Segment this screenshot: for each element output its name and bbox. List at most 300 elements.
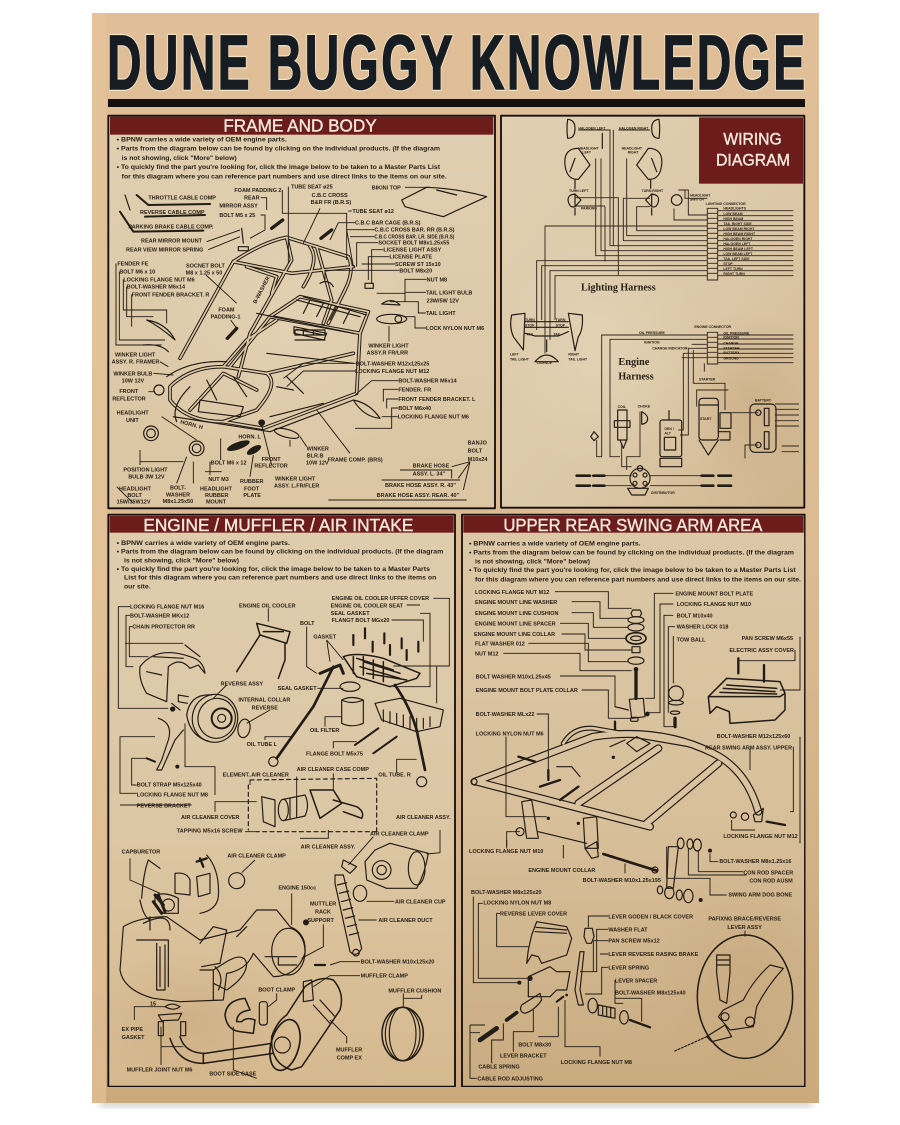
part labels: frame: BOLT M6 x 10	[119, 269, 155, 275]
part labels: frame: POSITION LIGHT	[123, 467, 168, 473]
part labels: frame: LOCK NYLON NUT M6	[426, 326, 484, 332]
panel: wiring diagram	[501, 116, 804, 508]
diagram: carburetor and engine block	[120, 855, 309, 1002]
part labels: frame: FENDER. FR	[398, 387, 431, 393]
part labels: engine top: CHAIN PROTECTOR RR	[132, 625, 195, 631]
wiring labels: SWITCH	[690, 198, 704, 202]
leader lines: swing top	[503, 592, 800, 847]
engine harness wires	[597, 335, 799, 486]
part labels: frame: THROTTLE CABLE COMP	[148, 195, 216, 201]
part labels: frame: REAR MIRROR MOUNT	[141, 238, 203, 244]
intro text block: for this diagram where you can reference part numbers and use direct links to the items on our site.	[122, 173, 447, 180]
diagram region: swing arm lower and reverse lever	[469, 838, 793, 1082]
part labels: frame: BOLT M5 x 25	[219, 213, 255, 219]
part labels: frame: PARKING BRAKE CABLE COMP.	[128, 225, 214, 231]
part labels: frame: HORN. H	[179, 419, 203, 431]
part labels: frame: C.B.C CROSS BAR. RR (B.R.S)	[374, 228, 455, 234]
part labels: frame: FRONT FENDER BRACKET. R	[132, 292, 209, 298]
panel: frame and body	[108, 116, 495, 508]
part labels: swing top: ELECTRIC ASSY COVER	[729, 648, 794, 654]
part labels: frame: WINKER LIGHT	[368, 343, 409, 349]
part labels: frame: LOCKING FLANGE NUT M6	[123, 277, 195, 283]
part labels: engine top: AIR CLEANER CLAMP	[370, 831, 429, 837]
part labels: frame: TUBE SEAT ø12	[352, 209, 394, 215]
wiring labels: HALOGEN LEFT	[578, 126, 606, 130]
intro text block: • BPNW carries a wide variety of OEM engine parts.	[469, 540, 641, 547]
part labels: frame: BOLT	[127, 493, 143, 499]
wiring labels: GEN /	[664, 427, 674, 431]
wiring labels: PARKING	[581, 206, 597, 210]
wiring labels: HALOGEN RIGHT	[723, 237, 753, 241]
part labels: frame: LICENSE PLATE	[389, 255, 433, 261]
part labels: swing lower: LEVER SPACER	[615, 978, 657, 984]
part labels: frame: C.B.C CROSS	[312, 193, 348, 199]
part labels: swing top: LOCKING FLANGE NUT M10	[677, 602, 751, 608]
part labels: frame: BOLT	[468, 449, 483, 455]
heading: wiring diagram	[716, 130, 790, 169]
part labels: engine top: BOLT-WASHER MKx12	[130, 613, 189, 619]
part labels: frame: ASSY.R FR/LRR	[367, 350, 408, 356]
part labels: frame: RUBBER	[205, 493, 228, 499]
leader lines: swing lower	[470, 840, 747, 1078]
part labels: frame: FRONT	[119, 389, 139, 395]
part labels: swing lower: REVERSE LEVER COVER	[500, 911, 567, 917]
part labels: engine top: AIR CLEANER COVER	[181, 815, 240, 821]
diagram: air cleaner	[248, 778, 377, 832]
part labels: engine top: REVERSE ASSY	[221, 681, 263, 687]
part labels: frame: REAR VIEW MIRROR SPRING	[126, 248, 203, 254]
part labels: frame: REFLECTOR	[112, 396, 146, 402]
part labels: swing top: ENGINE MOUNT LINE CUSHION	[475, 611, 559, 617]
wiring labels: TAIL LIGHT	[568, 358, 588, 362]
lighting harness wires	[537, 130, 793, 353]
part labels: swing top: LOCKING NYLON NUT M6	[476, 732, 544, 738]
part labels: swing top	[474, 590, 798, 840]
part labels: swing top: ENGINE MOUNT BOLT PLATE	[675, 591, 753, 597]
diagram: oil cooler and filter	[269, 628, 443, 787]
part labels: engine lower: AIR CLEANER ASSY.	[301, 845, 356, 851]
panel: engine / muffler / air intake	[108, 515, 455, 1087]
part labels: swing lower: LOCKING NYLON NUT M8	[483, 901, 551, 907]
part labels: swing top: ENGINE MOUNT LINE WASHER	[475, 600, 557, 606]
wiring labels: TURN	[556, 318, 566, 322]
engine connector block	[707, 332, 718, 364]
wiring labels	[510, 126, 772, 495]
part labels: engine lower: MUTTLER	[310, 901, 336, 907]
wiring labels: LEFT	[510, 353, 520, 357]
diagram: electric assy cover	[708, 658, 785, 723]
part labels: engine top: SEAL GASKET	[278, 686, 317, 692]
header bar: swing arm	[463, 516, 804, 533]
wiring labels: TAIL LIGHT	[510, 358, 530, 362]
panel border	[501, 116, 804, 508]
wiring labels: TURN RIGHT	[642, 189, 664, 193]
wiring labels: GROUND	[723, 356, 739, 360]
part labels: frame: NUT M3	[208, 477, 229, 483]
wiring labels: STARTER	[723, 346, 740, 350]
wiring labels: TAIL LEFT SIDE	[723, 257, 750, 261]
part labels: frame: BRAKE HOSE ASSY. R. 43"	[385, 483, 456, 489]
lighting connector block	[707, 208, 718, 280]
part labels: engine top: LOCKING FLANGE NUT M8	[137, 793, 208, 799]
part labels: engine top: ENGINE OIL COOLER SEAT	[331, 603, 404, 609]
diagram: air cleaner assembly and duct	[229, 843, 428, 965]
part labels: swing top: ENGINE MOUNT LINE COLLAR	[474, 632, 555, 638]
part labels: engine lower: AIR CLEANER CUP	[395, 899, 446, 905]
part labels: swing top: BOLT-WASHER M12x125x60	[717, 734, 790, 740]
wiring labels: HEADLIGHT	[622, 146, 643, 150]
part labels: frame: M10x24	[468, 457, 488, 463]
intro text block	[117, 540, 444, 590]
part labels: frame: BOLT M6 x 12	[211, 461, 247, 467]
diagram: dog bone and bolts	[585, 838, 712, 903]
part labels: engine lower: AIR CLEANER DUCT	[378, 918, 433, 924]
intro text block: • To quickly find the part you're looking for, click the image below to be taken to a Master Parts List	[469, 567, 797, 574]
wiring labels: HIGH BEAM RIGHT	[723, 232, 756, 236]
part labels: swing lower: BOLT-WASHER M8x125x40	[615, 991, 686, 997]
wiring labels: BATTERY	[723, 351, 740, 355]
part labels: swing lower	[469, 849, 793, 1082]
intro text block	[117, 136, 447, 180]
part labels: frame: 15W/35W12V	[117, 500, 151, 506]
part labels: frame: BRAKE HOSE ASSY. REAR. 40"	[377, 493, 460, 499]
wiring labels: HALOGEN RIGHT	[619, 126, 649, 130]
part labels: swing lower: CABLE ROD ADJUSTING	[477, 1076, 543, 1082]
part labels: engine top: TAPPING M5x16 SCREW	[177, 828, 244, 834]
part labels: swing top: WASHER LOCK 018	[677, 625, 728, 631]
leader lines: engine lower	[130, 830, 440, 1078]
part labels: swing lower: LEVER REVERSE RASING BRAKE	[608, 952, 699, 958]
wiring labels: IGNITION	[723, 336, 739, 340]
part labels: engine top: OIL FILTER	[310, 728, 339, 734]
diagram region: engine, muffler and air intake lower	[120, 830, 446, 1078]
wiring labels: TURN LEFT	[569, 189, 589, 193]
diagram: swing arm frame tubes	[475, 728, 758, 827]
header bar: engine	[110, 516, 454, 533]
part labels: engine lower	[122, 845, 446, 1078]
spark plugs	[577, 476, 731, 486]
part labels: engine lower: 15	[150, 1002, 156, 1008]
wiring labels: IGNITION	[644, 340, 660, 344]
part labels: engine lower: COMP EX	[337, 1055, 362, 1061]
part labels: frame: HEADLIGHT	[117, 411, 149, 417]
heading: engine / muffler / air intake: ENGINE / MUFFLER / AIR INTAKE	[143, 515, 413, 535]
part labels: frame: 10W 12V	[306, 460, 329, 466]
part labels: swing top: TOW BALL	[677, 638, 706, 644]
part labels: engine lower: MUFFLER JOINT NUT M6	[127, 1068, 192, 1074]
leader lines: engine top	[118, 598, 449, 832]
part labels: frame: WASHER	[166, 492, 190, 498]
part labels: frame: M8 x 1.25 x 50	[186, 271, 222, 277]
part labels: swing lower: ENGINE MOUNT COLLAR	[528, 868, 595, 874]
part labels: engine top: OIL TUBE. R	[378, 773, 411, 779]
part labels: frame: PLATE	[243, 493, 261, 499]
part labels: frame: HORN. L	[238, 435, 262, 441]
part labels: swing top: ENGINE MOUNT LINE SPACER	[475, 622, 556, 628]
wiring labels: LOW BEAM LEFT	[723, 252, 753, 256]
part labels: engine top: INTERNAL COLLAR	[238, 697, 290, 703]
panel: upper rear swing arm area	[462, 515, 805, 1087]
part labels: frame: FRAME COMP. (BRS)	[328, 457, 383, 463]
part labels: frame: WINKER	[307, 446, 329, 452]
part labels: engine top: LOCKING FLANGE NUT M16	[130, 605, 204, 611]
part labels: frame: BOLT-WASHER M6x14	[127, 284, 186, 290]
part labels: frame: ASSY. L. 34"	[413, 472, 446, 478]
part labels: frame: BIKINI TOP	[372, 185, 401, 191]
part labels: swing lower: BOLT-WASHER M8x125x20	[471, 890, 542, 896]
part labels: engine lower: RACK	[315, 910, 331, 916]
part labels: engine top	[130, 596, 451, 837]
part labels: engine top: ENGINE OIL COOLER	[239, 603, 296, 609]
part labels: frame: BOLT-WASHER M6x14	[398, 379, 458, 385]
part labels: swing top: FLAT WASHER 012	[475, 642, 525, 648]
intro text block: our site.	[124, 583, 151, 590]
part labels: swing lower: SWING ARM DOG BONE	[728, 892, 792, 898]
part labels: frame: C.B.C BAR CAGE (B.R.S)	[355, 221, 421, 227]
part labels: frame: M8x1.25x50	[163, 499, 193, 505]
part labels: engine lower: AIR CLEANER CLAMP	[227, 853, 286, 859]
wiring labels: RIGHT TURN	[723, 272, 745, 276]
part labels: frame: HEADLIGHT	[119, 486, 152, 492]
wiring labels: LOW BEAM	[723, 212, 743, 216]
part labels: frame: REAR	[244, 196, 260, 202]
intro text block: is not showing, click "More" below)	[475, 558, 590, 565]
part labels: frame: BOLT-WASHER M12x125x25	[356, 361, 429, 367]
part labels: swing lower: PAFIXNG BRACE/REVERSE	[708, 916, 781, 922]
part labels: engine lower: EX PIPE	[122, 1027, 143, 1033]
wiring labels: START	[700, 417, 712, 421]
part labels: engine top: BOLT	[300, 621, 315, 627]
wiring labels: DISTRIBUTOR	[651, 491, 675, 495]
icons: coil, regulator, starter, battery, distributor	[591, 398, 776, 495]
part labels: frame: C.B.C CROSS BAR. LR. SIDE (B.R.S)	[374, 234, 454, 240]
wiring labels: LEFT TURN	[723, 267, 743, 271]
part labels: frame: WINKER LIGHT	[275, 477, 316, 483]
part labels: engine lower: SUPPORT	[307, 918, 334, 924]
part labels: frame: SOCNET BOLT	[186, 264, 226, 270]
intro text block: is not showing, click "More" below)	[124, 557, 239, 564]
part labels: frame: WINKER BULB	[113, 371, 152, 377]
part labels: swing top: LOCKING FLANGE NUT M12	[475, 590, 549, 596]
part labels: swing top: ENGINE MOUNT BOLT PLATE COLLAR	[476, 688, 578, 694]
engine harness label: Engine	[618, 357, 650, 368]
intro text block: is not showing, click "More" below)	[122, 155, 237, 162]
part labels: engine lower: BOOT CLAMP	[258, 987, 296, 993]
part labels: frame: BLR.B	[307, 454, 323, 460]
part labels: frame: FOAM	[218, 307, 235, 313]
leader lines: frame	[116, 187, 470, 503]
wiring labels: STARTER	[699, 378, 716, 382]
part labels: engine lower: CAPBURETOR	[122, 849, 160, 855]
header bar: frame and body	[110, 117, 493, 135]
part labels: frame: FOAM PADDING 2	[234, 188, 281, 194]
wiring labels: TURN	[525, 318, 535, 322]
part labels: engine top: FLANGE BOLT M5x75	[306, 751, 363, 757]
part labels: swing top: NUT M12	[475, 652, 498, 658]
intro text block	[469, 540, 801, 583]
part labels: frame: PADDING-1	[211, 315, 240, 321]
intro text block: List for this diagram where you can reference part numbers and use direct links to the items on	[124, 575, 436, 582]
engine harness label	[618, 357, 654, 382]
part labels: swing top: PAN SCREW M6x55	[742, 636, 793, 642]
part labels: frame: BRAKE HOSE	[413, 463, 450, 469]
part labels: swing lower: LEVER ASSY	[727, 925, 762, 931]
part labels: frame	[112, 185, 488, 506]
part labels: swing top: BOLT WASHER M10x1.25x45	[476, 674, 551, 680]
wiring labels: CHARGE	[723, 341, 739, 345]
part labels: engine lower: MUFFLER	[336, 1047, 362, 1053]
part labels: frame: FRONT FENDER BRACKET. L	[398, 397, 476, 403]
heading: frame and body: FRAME AND BODY	[223, 116, 377, 136]
heading: wiring diagram: DIAGRAM	[716, 150, 790, 169]
icons: headlights, halogen and turn lamps	[511, 119, 682, 362]
part labels: frame: FENDER FE	[117, 261, 149, 267]
part labels: engine top: OIL TUBE L	[247, 742, 278, 748]
part labels: frame: LICENSE LIGHT ASSY	[383, 248, 442, 254]
part labels: engine top: ELEMENT..AIR CLEANER	[223, 773, 289, 779]
wiring labels: RIGHT	[568, 353, 580, 357]
part labels: swing lower: PAN SCREW M5x12	[608, 939, 660, 945]
part labels: swing top: BOLT M10x40	[677, 613, 713, 619]
intro text block: • BPNW carries a wide variety of OEM engine parts.	[117, 540, 290, 547]
wiring labels: LIGHTING CONNECTOR	[706, 202, 746, 206]
title: DUNE BUGGY KNOWLEDGE	[107, 19, 805, 106]
part labels: swing lower: BOLT-WASHER M8x1.25x16	[719, 859, 791, 865]
part labels: frame: 10W 12V	[122, 378, 145, 384]
wiring labels: BATTERY	[755, 399, 772, 403]
wiring labels: STOP	[556, 324, 566, 328]
part labels: swing lower: CON ROD SPACER	[743, 870, 793, 876]
part labels: frame: FOOT	[244, 486, 260, 492]
intro text block: • Parts from the diagram below can be found by clicking on the individual products. (If the diagram	[117, 146, 440, 153]
part labels: swing lower: WASHER FLAT	[608, 927, 648, 933]
part labels: frame: ASSY. R. FRAMER	[112, 360, 160, 366]
intro text block: • To quickly find the part you're looking for, click the image below to be taken to a Master Parts	[117, 566, 431, 573]
part labels: engine lower: GASKET	[122, 1035, 145, 1041]
diagram: reverse lever assembly	[480, 922, 650, 1040]
wiring labels: OIL PRESSURE	[723, 331, 750, 335]
part labels: swing lower: LEVER BRACKET	[500, 1053, 547, 1059]
heading: upper rear swing arm area: UPPER REAR SWING ARM AREA	[503, 515, 762, 535]
panel border	[108, 116, 495, 508]
wiring labels: OIL PRESSURE	[639, 331, 666, 335]
intro text block: • BPNW carries a wide variety of OEM engine parts.	[117, 136, 287, 143]
part labels: swing lower: LEVER SPRING	[608, 965, 649, 971]
part labels: frame: LOCKING FLANGE NUT M12	[355, 369, 429, 375]
part labels: swing top: BOLT-WASHER MLx22	[476, 712, 534, 718]
part labels: frame: 23W/5W 12V	[427, 298, 459, 304]
title rule	[108, 99, 805, 107]
wiring labels: CHOKE	[638, 404, 651, 408]
part labels: swing lower: BOLT-WASHER M10x1.25x195	[583, 878, 661, 884]
wiring labels: RIGHT	[628, 150, 639, 154]
part labels: frame: B-WASHER	[252, 276, 272, 305]
part labels: frame: WINKER LIGHT	[115, 352, 156, 358]
wiring labels: LEFT	[582, 150, 592, 154]
diagram: chain protector and reverse assembly	[140, 623, 290, 770]
part labels: frame: MIRROR ASSY	[219, 204, 258, 210]
part labels: engine top: AIR CLEANER CASE COMP	[297, 767, 369, 773]
diagram: muffler and exhaust	[158, 978, 423, 1074]
wiring labels: TAIL RIGHT SIDE	[723, 222, 752, 226]
wiring labels: ENGINE CONNECTOR	[694, 325, 732, 329]
part labels: engine top: SEAL GASKET	[331, 611, 370, 617]
title: DUNE BUGGY KNOWLEDGE	[107, 19, 805, 106]
part labels: frame: TUBE SEAT ø25	[291, 185, 333, 191]
engine harness label: Harness	[618, 371, 654, 382]
part labels: frame: TAIL LIGHT BULB	[426, 290, 472, 296]
wiring labels: HEADLIGHT	[690, 194, 711, 198]
part labels: swing lower: LEVER GODEN / BLACK COVER	[608, 914, 693, 920]
part labels: frame: RUBBER	[240, 479, 263, 485]
part labels: frame: BOLT-	[170, 485, 186, 491]
part labels: frame: B&R FR (B.R.S)	[311, 200, 351, 206]
part labels: engine top: AIR CLEANER ASSY.	[396, 815, 451, 821]
part labels: engine lower: MUFFLER CUSHION	[388, 988, 441, 994]
panel border	[462, 515, 805, 1087]
part labels: frame: MOUNT	[206, 500, 227, 506]
part labels: frame: REFLECTOR	[254, 464, 288, 470]
wiring labels: TAIL	[553, 332, 562, 336]
wiring labels: HIGH BEAM	[723, 217, 743, 221]
part labels: frame: SCREW ST 15x10	[395, 262, 441, 268]
wiring labels: ALT	[664, 431, 672, 435]
wiring labels: HEADLIGHTS	[723, 206, 747, 210]
part labels: swing top: LOCKING FLANGE NUT M12	[723, 834, 798, 840]
wiring labels: STOP	[723, 262, 733, 266]
part labels: frame: LOCKING FLANGE NUT M6	[398, 415, 469, 421]
part labels: frame: HEADLIGHT	[200, 486, 233, 492]
intro text block: • Parts from the diagram below can be found by clicking on the individual products. (If the diagram	[117, 549, 444, 556]
part labels: frame: TAIL LIGHT	[426, 311, 456, 317]
heading: wiring diagram: WIRING	[723, 130, 782, 149]
part labels: frame: SOCKET BOLT M8x1.25x55	[378, 241, 449, 247]
intro text block: • To quickly find the part you're looking for, click the image below to be taken to a Master Parts List	[117, 164, 441, 171]
part labels: frame: BULB 3W 12V	[128, 475, 165, 481]
part labels: swing lower: CABLE SPRING	[478, 1065, 520, 1071]
wiring labels: HALOGEN LEFT	[723, 242, 751, 246]
intro text block: for this diagram where you can reference part numbers and use direct links to the items on our site.	[475, 576, 801, 583]
part labels: swing lower: LOCKING FLANGE NUT M8	[561, 1060, 632, 1066]
lighting harness label: Lighting Harness	[581, 283, 656, 294]
part labels: engine lower: BOOT SIDE CASE	[209, 1072, 257, 1078]
part labels: frame: BANJO	[468, 441, 488, 447]
part labels: swing top: REAR SWING ARM ASSY. UPPER	[705, 745, 792, 751]
part labels: frame: BOLT M6x40	[398, 406, 431, 412]
wiring labels: LICENCE	[537, 361, 553, 365]
part labels: frame: BOLT M8x20	[399, 268, 432, 274]
part labels: frame: FRONT	[262, 457, 281, 463]
part labels: frame: ASSY. L.FR/FLER	[274, 484, 319, 490]
part labels: engine top: FLANGT BOLT MGx20	[332, 618, 389, 624]
part labels: swing lower: LOCKING FLANGE NUT M10	[469, 849, 543, 855]
part labels: engine top: PEVERSE BRACKET	[137, 803, 192, 809]
wiring labels: HEADLIGHT	[578, 146, 600, 150]
diagram: swing arm fittings	[471, 737, 785, 848]
part labels: engine top: ENGINE OIL COOLER UFFER COVER	[332, 596, 429, 602]
wiring labels: HIGH BEAM LEFT	[723, 247, 754, 251]
poster shadow	[100, 1092, 812, 1108]
part labels: engine lower: MUFFLER CLAMP	[361, 974, 408, 980]
part labels: engine top: REVERSE	[252, 705, 278, 711]
diagram: lever assy detail circle	[673, 935, 793, 1058]
part labels: engine lower: BOLT-WASHER M10x125x20	[361, 960, 434, 966]
diagram: engine mount stack	[615, 610, 650, 730]
part labels: engine top: GASKET	[313, 635, 337, 641]
wiring labels: LOW BEAM RIGHT	[723, 227, 755, 231]
diagram: tow ball	[669, 686, 683, 727]
wiring labels: COIL	[618, 405, 627, 409]
